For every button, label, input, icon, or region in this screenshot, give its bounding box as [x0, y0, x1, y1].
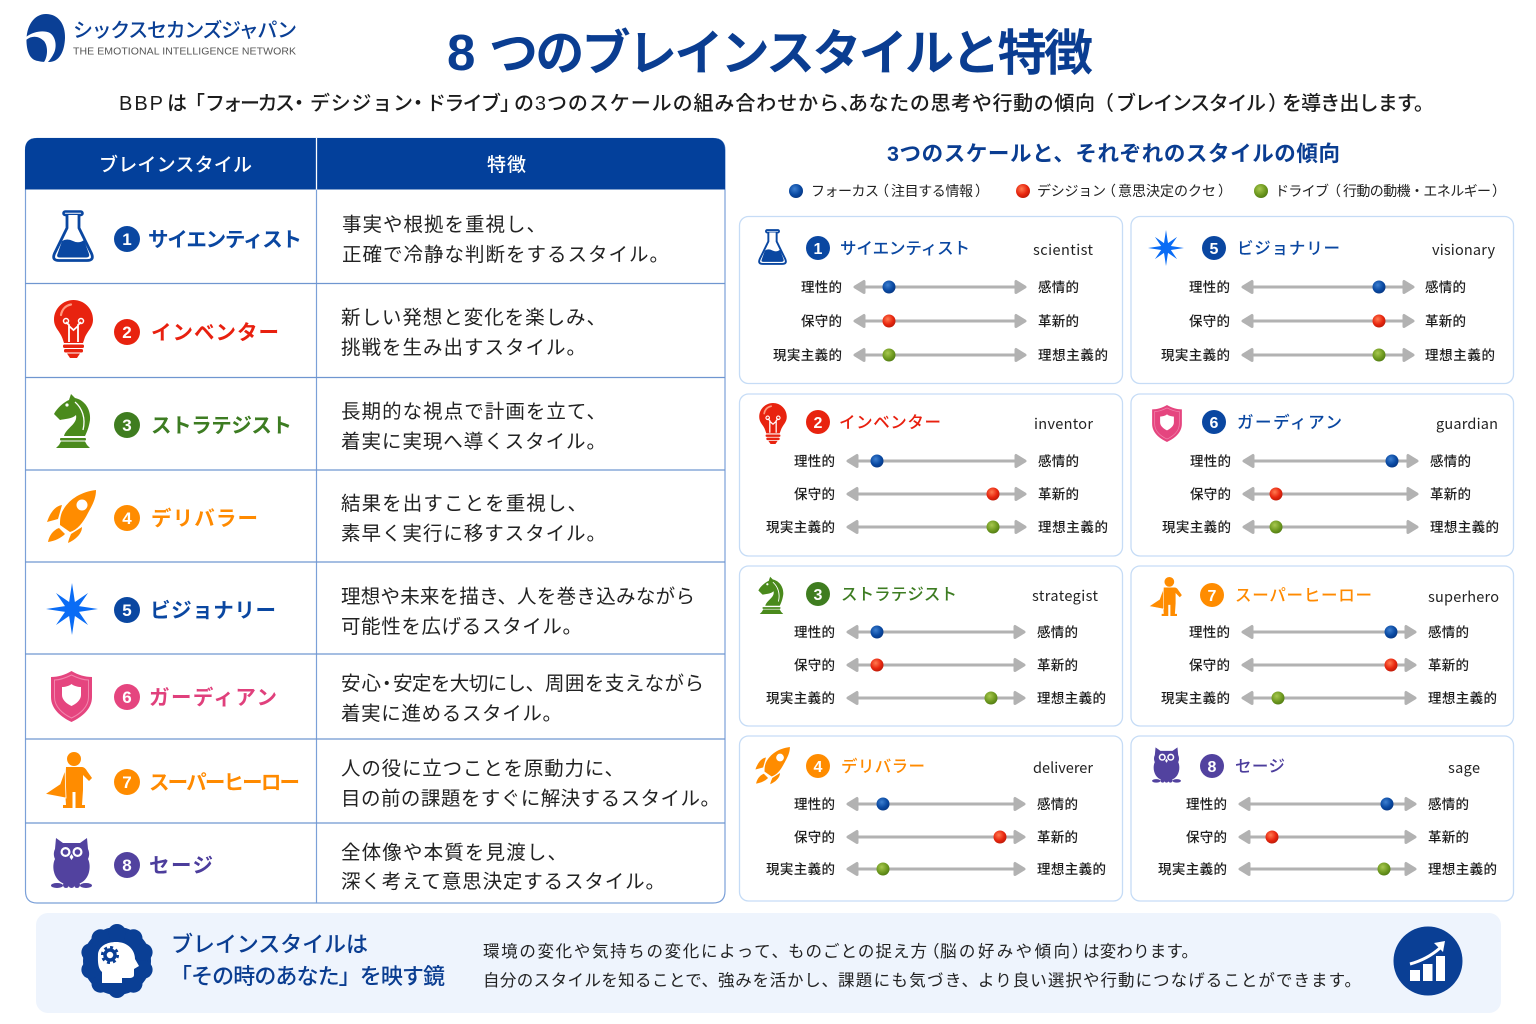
style name: インベンター — [151, 322, 279, 344]
description: 安心 — [341, 673, 381, 695]
name: インベンター — [839, 413, 941, 432]
panel: card deliverer — [740, 736, 1122, 901]
legend: decision: 意思決定のクセ — [1118, 183, 1216, 199]
subtitle: あなたの思考や行動の傾向 — [848, 92, 1095, 115]
description — [341, 493, 606, 545]
row 5: visionary — [46, 583, 695, 638]
description: ・ — [377, 673, 397, 695]
scale: drive: 現実主義的 — [1161, 347, 1230, 363]
scale: drive: 現実主義的 — [1162, 519, 1231, 535]
scale: drive: 理想主義的 — [1430, 519, 1499, 535]
table header: ブレインスタイル — [99, 153, 252, 176]
scale: decision: 革新的 — [1430, 486, 1471, 502]
legend: focus: 注目する情報 — [891, 183, 973, 199]
description — [341, 673, 704, 725]
subtitle: ・ — [289, 93, 309, 115]
scale: focus: 理性的 — [1190, 454, 1231, 469]
description — [341, 758, 720, 810]
name: サイエンティスト — [840, 240, 970, 258]
logo mark — [26, 14, 65, 63]
scale: decision: 保守的 — [1189, 314, 1230, 329]
scale: decision: 保守的 — [1186, 830, 1227, 845]
scale: drive: 理想主義的 — [1037, 861, 1106, 877]
scale: focus: 理性的 — [794, 454, 835, 469]
icon: superhero — [45, 752, 92, 808]
scale: drive — [1161, 690, 1497, 706]
row 2: inventor — [54, 300, 606, 359]
scale: focus — [1190, 453, 1471, 469]
scale: focus: 理性的 — [794, 797, 835, 812]
legend: drive: （ — [1327, 183, 1341, 199]
english name: superhero — [1428, 586, 1499, 607]
badge 6 — [114, 684, 140, 710]
subtitle: は — [167, 93, 187, 115]
legend: decision: （ — [1102, 183, 1116, 199]
icon: shield — [1152, 405, 1182, 442]
scale: focus — [794, 453, 1079, 469]
scales heading: 3つのスケールと、それぞれのスタイルの傾向 — [887, 142, 1340, 166]
scale: decision: 革新的 — [1037, 829, 1078, 845]
scale: drive: 理想主義的 — [1037, 690, 1106, 706]
panel: card visionary — [1131, 216, 1514, 384]
logo tagline: THE EMOTIONAL INTELLIGENCE NETWORK — [73, 46, 296, 58]
scale: decision: 革新的 — [1425, 313, 1466, 329]
style name: サイエンティスト — [148, 228, 302, 252]
icon: rocket — [47, 490, 96, 543]
badge 5: 5 — [122, 601, 132, 620]
panel: style table — [25, 138, 725, 903]
scale: drive — [1162, 519, 1499, 535]
badge 5 — [114, 597, 140, 623]
subtitle: ドライブ — [426, 91, 501, 115]
badge 7: 7 — [1208, 588, 1217, 605]
logo name: シックスセカンズジャパン — [73, 19, 297, 42]
scale: focus — [1189, 279, 1466, 295]
style name: セージ — [149, 854, 213, 878]
row 8: sage — [51, 838, 665, 893]
table header — [25, 138, 725, 190]
name: セージ — [1235, 758, 1285, 776]
scale: focus: 理性的 — [794, 625, 835, 640]
icon: light bulb — [54, 300, 93, 358]
scale: focus — [1189, 624, 1469, 640]
badge 6 — [1202, 410, 1226, 434]
name: ガーディアン — [1237, 412, 1342, 432]
subtitle: デシジョン — [310, 91, 413, 115]
description: 人の役に立つことを原動力に、 — [341, 758, 624, 780]
row 4: deliverer — [47, 490, 606, 545]
scale: drive: 現実主義的 — [766, 519, 835, 535]
legend: decision: ） — [1218, 183, 1232, 199]
panel: card strategist — [740, 566, 1122, 726]
title: 8 — [447, 24, 475, 81]
scale: drive: 現実主義的 — [766, 861, 835, 877]
legend: decision: デシジョン — [1037, 183, 1106, 199]
badge 6: 6 — [122, 688, 132, 707]
callout text: ） — [1072, 942, 1088, 961]
icon: growth chart — [1394, 926, 1462, 996]
legend: focus — [789, 183, 989, 199]
description: 着実に進めるスタイル。 — [341, 703, 562, 725]
callout text: 環境の変化や気持ちの変化によって、 — [483, 942, 788, 961]
badge 7 — [114, 769, 140, 795]
subtitle: ブレインスタイル — [1116, 91, 1266, 115]
subtitle: （ — [1094, 92, 1114, 115]
subtitle: ・ — [408, 93, 428, 115]
badge 2: 2 — [122, 323, 132, 342]
scale: decision: 革新的 — [1037, 657, 1078, 673]
style name: デリバラー — [151, 506, 258, 530]
description — [341, 307, 606, 359]
scale: drive: 現実主義的 — [766, 690, 835, 706]
subtitle: を導き出します。 — [1282, 92, 1434, 115]
style name: ストラテジスト — [151, 414, 292, 438]
description — [341, 401, 606, 453]
legend: drive: ） — [1492, 183, 1506, 199]
icon: superhero — [1149, 577, 1182, 616]
scale: decision: 保守的 — [794, 830, 835, 845]
logo: Six Seconds Japan — [26, 14, 297, 63]
legend: focus: （ — [875, 183, 889, 199]
description: 挑戦を生み出すスタイル。 — [341, 337, 586, 359]
badge 1 — [806, 236, 830, 260]
subtitle: 「 — [185, 92, 205, 115]
callout text: 自分のスタイルを知ることで、 — [483, 971, 718, 990]
name: ビジョナリー — [1237, 239, 1340, 258]
callout text: （ — [923, 942, 940, 961]
panel: card sage — [1131, 736, 1514, 901]
scale: focus: 感情的 — [1038, 279, 1079, 295]
scale: decision — [794, 829, 1078, 845]
icon: head with gear — [81, 924, 153, 998]
callout text: 脳の好みや傾向 — [940, 942, 1070, 961]
description: 正確で冷静な判断をするスタイル。 — [342, 244, 669, 266]
badge 2: 2 — [814, 415, 823, 432]
icon: star — [46, 583, 98, 635]
name: スーパーヒーロー — [1235, 586, 1372, 605]
scale: drive — [1158, 861, 1497, 877]
panel: card scientist — [740, 216, 1122, 384]
scale: decision — [1189, 657, 1469, 673]
scale: decision: 革新的 — [1038, 313, 1079, 329]
legend: focus: ） — [975, 183, 989, 199]
scale: focus: 理性的 — [1189, 280, 1230, 295]
legend: drive: 行動の動機・エネルギー — [1343, 183, 1491, 199]
scale: drive — [766, 690, 1106, 706]
subtitle: フォーカス — [205, 93, 295, 115]
badge 4 — [114, 505, 140, 531]
scale: decision — [1189, 313, 1466, 329]
scale: decision: 保守的 — [794, 658, 835, 673]
description: 新しい発想と変化を楽しみ、 — [341, 307, 606, 329]
scale: drive — [766, 861, 1106, 877]
scale: focus — [794, 796, 1078, 812]
description: 可能性を広げるスタイル。 — [341, 616, 582, 638]
english name: strategist — [1032, 585, 1099, 606]
badge 6: 6 — [1210, 415, 1219, 432]
description: 周囲を支えながら — [545, 673, 704, 695]
panel: bottom message — [36, 913, 1501, 1013]
scale: drive: 理想主義的 — [1038, 347, 1108, 363]
title: つのブレインスタイルと特徴 — [489, 27, 1093, 81]
scale: focus — [1186, 796, 1469, 812]
legend — [789, 183, 1506, 199]
description: 全体像や本質を見渡し、 — [341, 842, 567, 864]
row 1: scientist — [54, 212, 669, 266]
scale: focus: 感情的 — [1428, 796, 1469, 812]
badge 1: 1 — [814, 241, 823, 258]
name: デリバラー — [841, 756, 925, 776]
badge 5: 5 — [1210, 241, 1219, 258]
icon: rocket — [755, 747, 790, 784]
scale: decision: 保守的 — [794, 487, 835, 502]
name: ストラテジスト — [841, 586, 957, 604]
scale: focus — [801, 279, 1079, 295]
scale: focus: 感情的 — [1428, 624, 1469, 640]
description: 素早く実行に移すスタイル。 — [341, 523, 606, 545]
icon: light bulb — [759, 403, 787, 444]
table header: 特徴 — [487, 154, 526, 176]
row 7: superhero — [45, 752, 720, 810]
scale: drive — [766, 519, 1108, 535]
scale: drive: 現実主義的 — [773, 347, 842, 363]
row 6: guardian — [51, 671, 704, 725]
icon: chess knight — [758, 577, 783, 614]
scale: focus — [794, 624, 1078, 640]
legend: decision — [1016, 183, 1232, 199]
badge 3: 3 — [122, 416, 132, 435]
badge 5 — [1202, 236, 1226, 260]
badge 3 — [806, 582, 830, 606]
english name: sage — [1448, 757, 1480, 778]
badge 7: 7 — [122, 773, 132, 792]
scale: drive: 理想主義的 — [1038, 519, 1108, 535]
scale: decision: 革新的 — [1428, 829, 1469, 845]
description: 安定を大切にし、 — [393, 673, 545, 695]
badge 8 — [114, 852, 140, 878]
scale: decision — [1190, 486, 1471, 502]
style name: ガーディアン — [149, 686, 277, 710]
subtitle: 」 — [500, 93, 520, 115]
description — [342, 214, 669, 266]
icon: chess knight — [54, 394, 90, 448]
badge 3: 3 — [814, 587, 823, 604]
badge 3 — [114, 412, 140, 438]
badge 8 — [1200, 754, 1224, 778]
english name: inventor — [1034, 413, 1093, 434]
style name: スーパーヒーロー — [149, 772, 300, 794]
scale: focus: 理性的 — [801, 280, 842, 295]
badge 8: 8 — [122, 856, 132, 875]
description: 結果を出すことを重視し、 — [341, 493, 587, 515]
english name: scientist — [1033, 239, 1094, 260]
scale: drive: 理想主義的 — [1428, 861, 1497, 877]
panel: card superhero — [1131, 566, 1514, 726]
callout text: より良い選択や行動につなげることができます。 — [978, 971, 1361, 990]
icon: flask — [54, 212, 92, 260]
subtitle — [119, 91, 1434, 115]
row 3: strategist — [54, 394, 606, 453]
callout text — [483, 942, 1361, 990]
scale: focus: 感情的 — [1037, 796, 1078, 812]
icon: star — [1148, 230, 1184, 266]
badge 2 — [806, 410, 830, 434]
legend: focus: フォーカス — [811, 183, 879, 199]
scale: focus: 感情的 — [1425, 279, 1466, 295]
callout text: ものごとの捉え方 — [788, 942, 927, 961]
description — [341, 586, 695, 638]
icon: owl — [51, 838, 92, 888]
icon: owl — [1152, 747, 1181, 783]
badge 4: 4 — [814, 759, 823, 776]
description: 人を巻き込みながら — [517, 586, 695, 608]
english name: deliverer — [1033, 757, 1093, 778]
scale: drive: 現実主義的 — [1161, 690, 1230, 706]
badge 2 — [114, 319, 140, 345]
style name: ビジョナリー — [150, 600, 276, 622]
scale: drive: 理想主義的 — [1425, 347, 1495, 363]
scale: focus: 感情的 — [1430, 453, 1471, 469]
description: 着実に実現へ導くスタイル。 — [341, 431, 606, 453]
callout heading: 「その時のあなた」を映す鏡 — [170, 964, 445, 989]
description — [341, 842, 665, 893]
description: 長期的な視点で計画を立て、 — [341, 401, 606, 423]
scale: focus: 感情的 — [1037, 624, 1078, 640]
scale: decision: 保守的 — [1189, 658, 1230, 673]
legend: drive: ドライブ — [1275, 183, 1329, 199]
callout text: 課題にも気づき、 — [838, 971, 978, 990]
legend: drive — [1254, 183, 1506, 199]
scale: drive: 理想主義的 — [1428, 690, 1497, 706]
badge 7 — [1200, 583, 1224, 607]
icon: flask — [759, 230, 786, 264]
badge 4 — [806, 754, 830, 778]
scale: decision: 革新的 — [1428, 657, 1469, 673]
scale: focus: 理性的 — [1189, 625, 1230, 640]
panel: card guardian — [1131, 394, 1514, 556]
scale: drive: 現実主義的 — [1158, 861, 1227, 877]
badge 1: 1 — [122, 230, 132, 249]
subtitle: BBP — [119, 93, 163, 115]
badge 4: 4 — [122, 509, 132, 528]
scale: decision: 保守的 — [801, 314, 842, 329]
subtitle: の3つのスケールの組み合わせから、 — [514, 92, 860, 115]
scale: decision — [794, 486, 1079, 502]
icon: shield — [51, 671, 92, 722]
callout text: 強みを活かし、 — [718, 971, 838, 990]
scale: decision — [1186, 829, 1469, 845]
description: 理想や未来を描き、 — [341, 586, 517, 608]
callout heading — [170, 932, 445, 989]
panel: card inventor — [740, 394, 1122, 556]
english name: visionary — [1432, 239, 1495, 260]
scale: decision: 保守的 — [1190, 487, 1231, 502]
scale: decision: 革新的 — [1038, 486, 1079, 502]
scale: drive — [773, 347, 1108, 363]
callout text: は変わります。 — [1083, 942, 1198, 961]
badge 1 — [114, 226, 140, 252]
badge 8: 8 — [1208, 759, 1217, 776]
scale: drive — [1161, 347, 1495, 363]
description: 深く考えて意思決定するスタイル。 — [341, 871, 665, 893]
english name: guardian — [1436, 413, 1498, 434]
callout heading: ブレインスタイルは — [171, 932, 368, 957]
scale: decision — [794, 657, 1078, 673]
scale: focus: 感情的 — [1038, 453, 1079, 469]
description: 目の前の課題をすぐに解決するスタイル。 — [341, 788, 720, 810]
scale: decision — [801, 313, 1079, 329]
subtitle: ） — [1268, 92, 1288, 115]
description: 事実や根拠を重視し、 — [342, 214, 546, 236]
scale: focus: 理性的 — [1186, 797, 1227, 812]
